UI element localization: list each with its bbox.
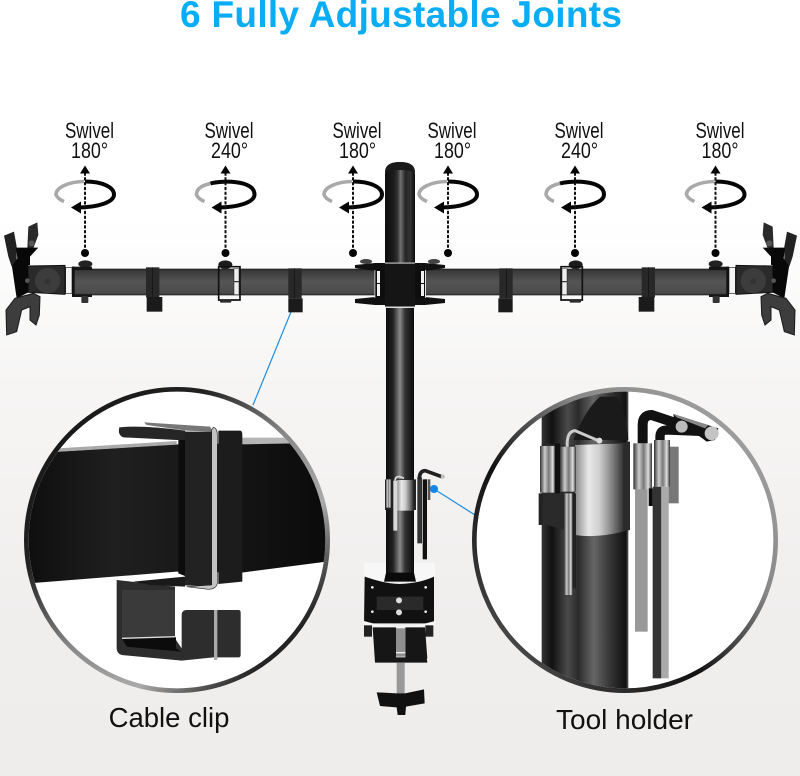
label 2: Swivel [204, 118, 254, 143]
label 4: Swivel [428, 118, 476, 143]
detail circle: tool holder [474, 387, 776, 693]
label 5: Swivel [554, 118, 604, 143]
clip top flange [119, 427, 188, 440]
pole [385, 162, 415, 573]
desk clamp [364, 553, 435, 715]
swivel icon 3 [324, 166, 382, 257]
left arm [4, 222, 375, 335]
swivel icon 6 [686, 166, 744, 257]
right arm [426, 222, 797, 335]
value 3: 180° [339, 138, 376, 163]
label 3: Swivel [332, 118, 382, 143]
leader line: tool holder [430, 485, 475, 515]
value 5: 240° [561, 138, 598, 163]
label 1: Swivel [65, 118, 114, 143]
right keys [635, 488, 648, 632]
label 6: Swivel [696, 118, 744, 143]
swivel labels [65, 118, 744, 163]
value 2: 240° [211, 138, 248, 163]
clip hook lower [117, 580, 241, 661]
value 1: 180° [71, 138, 108, 163]
clip band [178, 440, 185, 576]
swivel joints [56, 166, 744, 257]
leader line: cable clip [253, 302, 297, 405]
swivel icon 4 [419, 166, 477, 257]
right clips [633, 443, 652, 489]
pole collar and brackets [355, 259, 445, 308]
caption: cable clip: Cable clip [109, 702, 229, 733]
detail circle: cable clip [20, 389, 333, 691]
left clips [540, 446, 556, 493]
large arm bar [20, 443, 333, 584]
swivel icon 5 [546, 166, 604, 257]
value 4: 180° [434, 138, 471, 163]
small key [567, 431, 598, 448]
caption: tool holder: Tool holder [556, 704, 693, 735]
collar band [542, 442, 630, 534]
swivel icon 2 [196, 166, 254, 257]
large pole [542, 387, 628, 693]
monitor mount product [4, 162, 797, 715]
tool holder on pole [385, 471, 445, 559]
value 6: 180° [702, 138, 738, 163]
swivel icon 1 [56, 166, 114, 257]
